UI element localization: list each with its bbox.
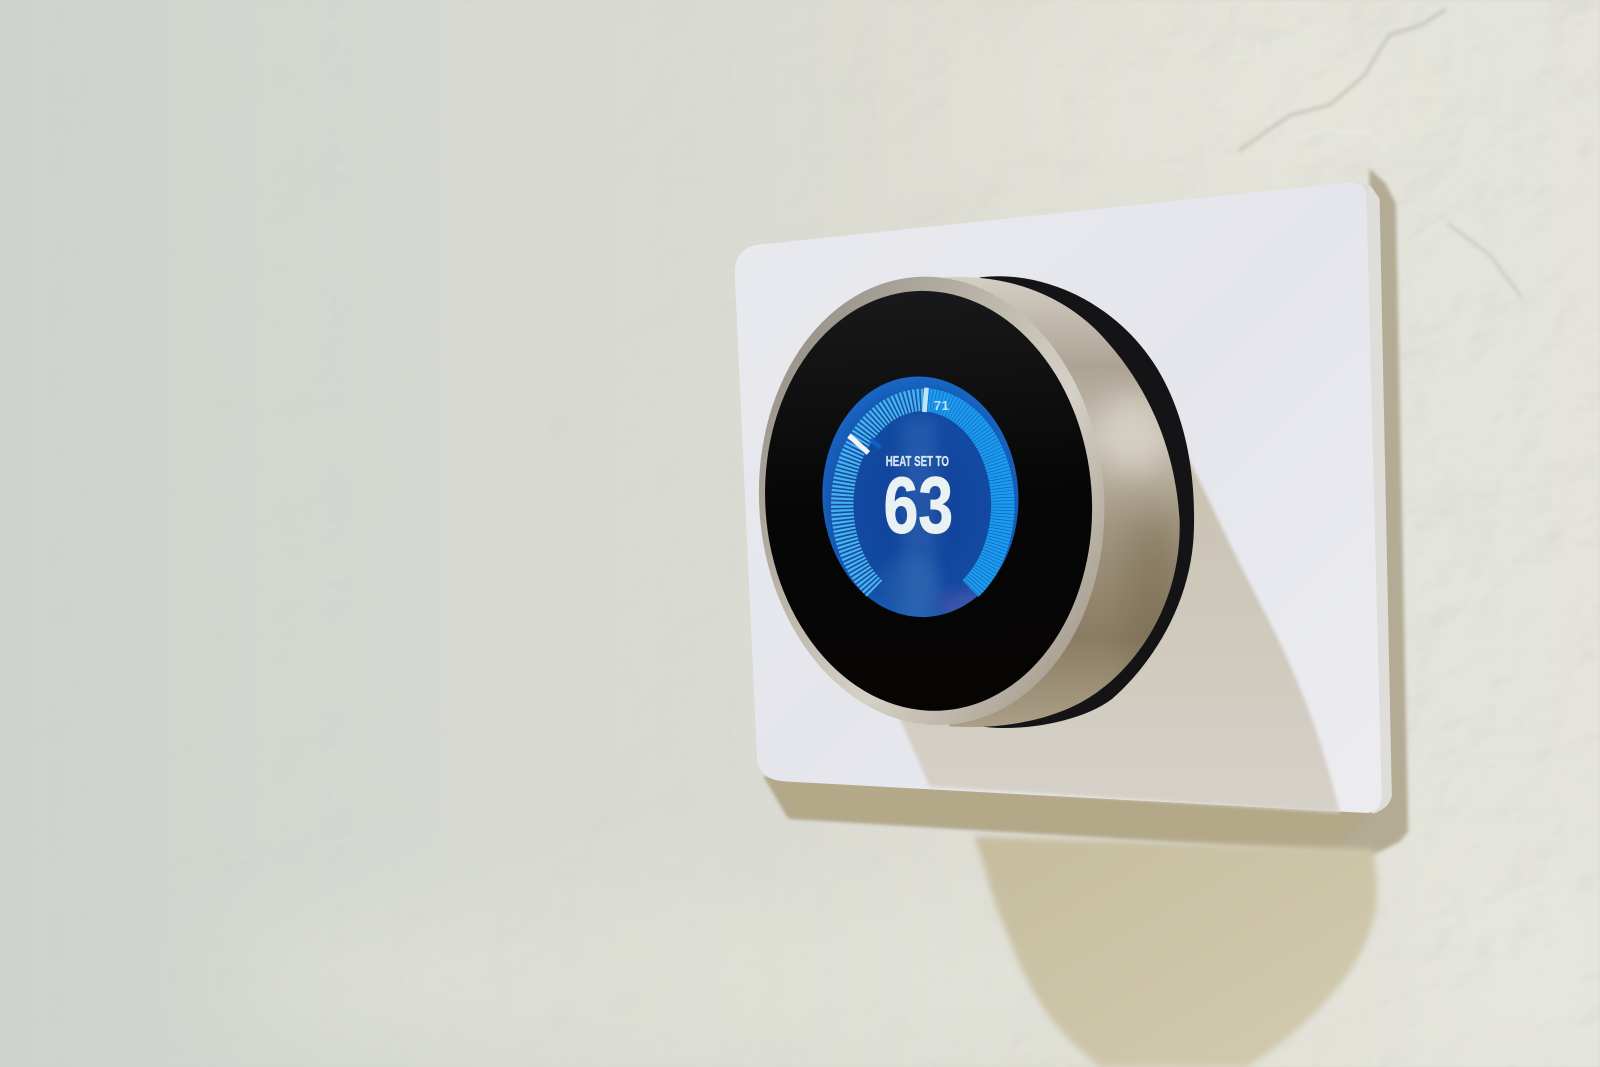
small dark tick: [870, 440, 881, 448]
body lower shade: [1131, 510, 1176, 694]
wall plate: [735, 182, 1392, 814]
wall shadow behind plate: [763, 168, 1408, 855]
black face: [751, 280, 1106, 722]
dial ticks left arc: [842, 400, 926, 589]
plate face: [735, 183, 1382, 813]
wall background: [372, 0, 1600, 1067]
body highlight: [1098, 395, 1167, 472]
plaster cracks: [429, 10, 1592, 995]
bezel: [744, 265, 1119, 737]
metal body: [944, 277, 1180, 727]
dial solid right arc: [926, 400, 1003, 589]
set-point marker: [849, 436, 868, 453]
plate side edge: [1349, 182, 1392, 814]
current marker: [924, 388, 927, 412]
thermostat: [744, 265, 1194, 737]
screen light streaks: [902, 418, 937, 622]
knob shadow on plate: [898, 459, 1340, 813]
label: heat set to: HEAT SET TO: [886, 454, 949, 470]
photo: thermostat on wall: [372, 0, 1600, 1067]
round shadow of the thermostat on the wall: [974, 836, 1377, 1067]
label: 71: 71: [934, 398, 949, 413]
display: [816, 371, 1025, 622]
rear dark ring: [980, 276, 1194, 728]
big temperature: 63: 63: [884, 460, 953, 549]
